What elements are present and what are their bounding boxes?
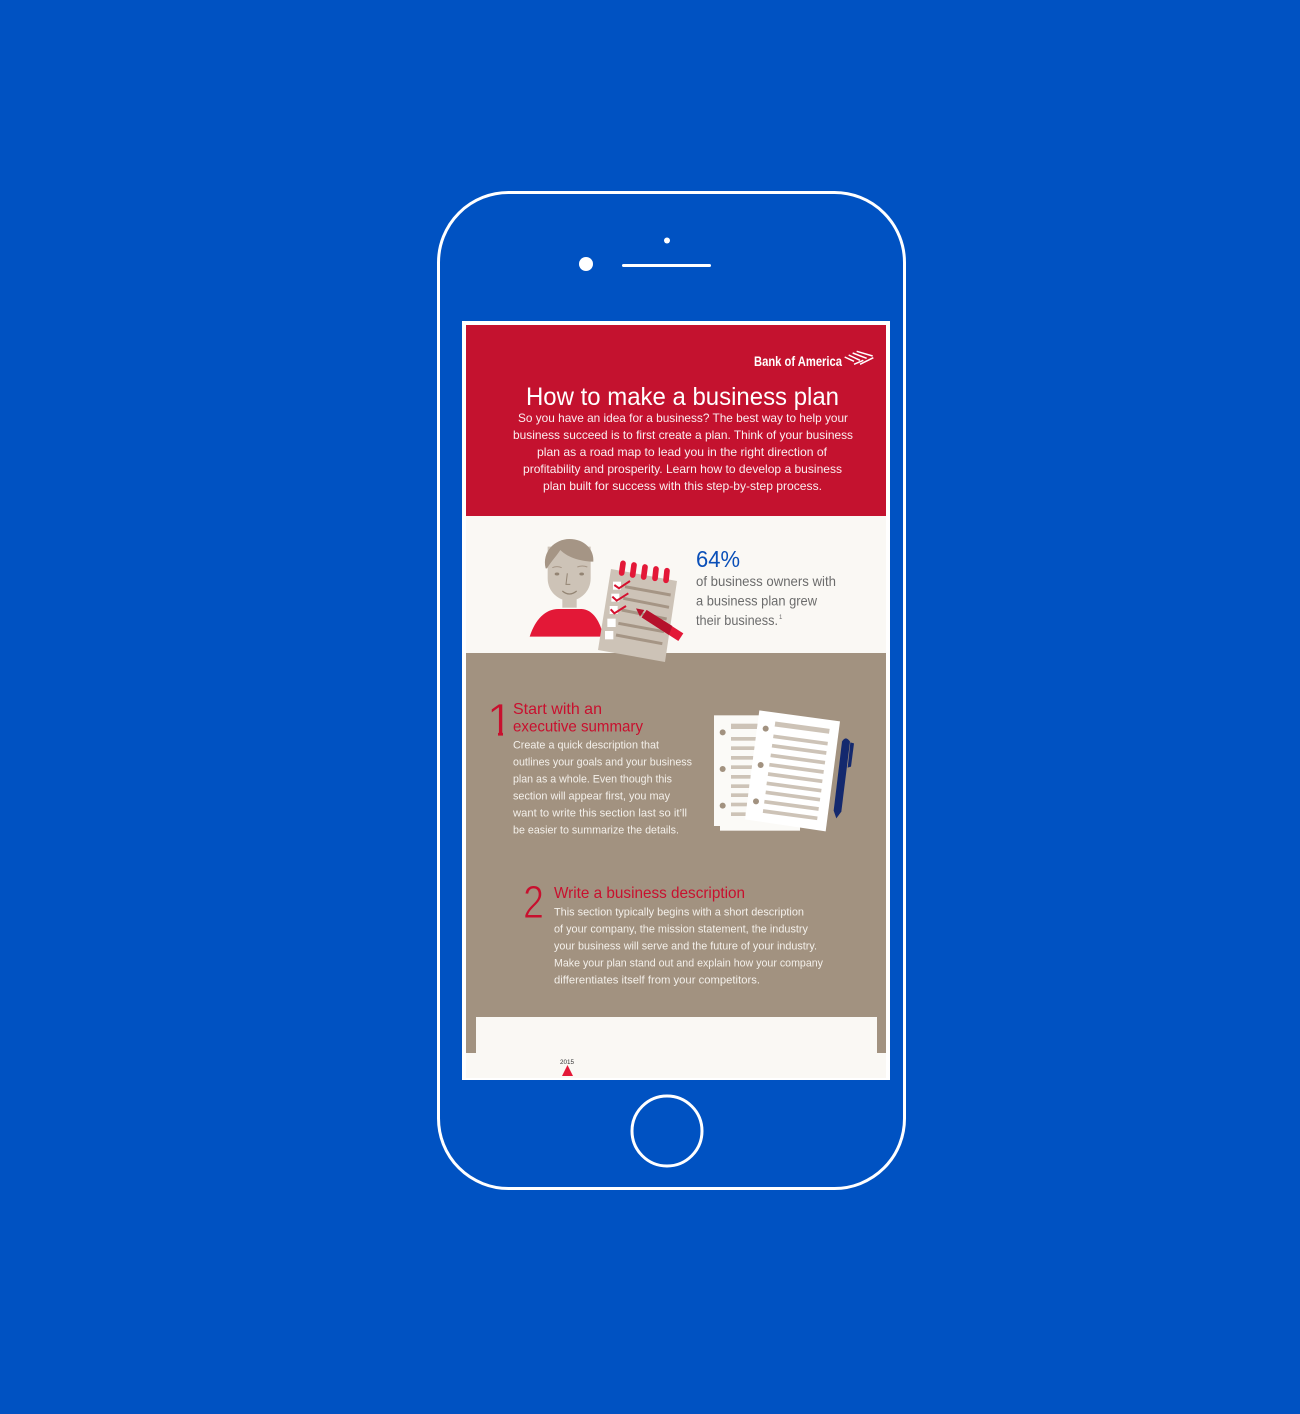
step 1 body: plan as a whole. Even though this	[513, 774, 672, 786]
statistic number: 64%	[696, 546, 740, 572]
cream timeline card	[476, 1017, 877, 1054]
intro text: plan as a road map to lead you in the right direction of	[537, 445, 828, 459]
phone mockup	[438, 192, 904, 1188]
pencil	[636, 608, 683, 641]
step 1 number: 1	[487, 694, 513, 746]
timeline marker	[560, 1060, 575, 1076]
step 1 heading: Start with an	[513, 701, 602, 718]
panel: steps	[466, 653, 886, 1054]
phone sensor	[664, 238, 670, 244]
statistic text: of business owners with	[696, 573, 836, 589]
timeline triangle	[562, 1065, 573, 1076]
icon: checklist with pencil	[598, 563, 683, 662]
intro text: So you have an idea for a business? The best way to help your	[518, 411, 848, 425]
person shirt	[530, 609, 604, 637]
timeline year: 2015	[560, 1060, 575, 1066]
notebook page	[598, 569, 677, 662]
pen	[834, 738, 854, 818]
step 2 body	[554, 906, 823, 986]
step 2 body: This section typically begins with a short description	[554, 906, 804, 918]
step 2 body: Make your plan stand out and explain how your company	[554, 958, 823, 970]
step 1 heading	[513, 701, 643, 736]
icon: papers and pen	[714, 710, 854, 831]
notebook checkboxes	[605, 582, 621, 639]
person face	[548, 547, 591, 601]
step 2 body: your business will serve and the future of your industry.	[554, 940, 817, 952]
person features	[552, 566, 587, 594]
step 2 number: 2	[523, 876, 544, 928]
intro text: business succeed is to first create a plan. Think of your business	[513, 428, 853, 442]
intro text	[513, 411, 853, 493]
logo: Bank of America	[754, 351, 873, 369]
logo wordmark: Bank of America	[754, 354, 842, 369]
notebook lines	[616, 587, 671, 644]
phone speaker	[622, 264, 711, 267]
back paper	[714, 715, 800, 831]
phone camera	[579, 257, 593, 271]
header background	[466, 325, 886, 516]
step 1 body: Create a quick description that	[513, 740, 659, 752]
notebook check marks	[611, 581, 630, 613]
step 1 body: want to write this section last so it’ll	[512, 808, 687, 820]
steps background	[466, 653, 886, 1053]
step 2 heading: Write a business description	[554, 885, 745, 902]
person neck	[562, 597, 577, 608]
phone screen	[462, 321, 890, 1080]
step 1 body	[512, 740, 692, 836]
panel: statistic	[530, 539, 836, 662]
phone outline	[438, 192, 904, 1188]
statistic text: their business.	[696, 612, 778, 628]
front paper	[745, 710, 840, 831]
screen background	[466, 325, 886, 1078]
step 1	[487, 694, 854, 836]
step 1 heading: executive summary	[513, 718, 643, 736]
step 2	[523, 876, 823, 986]
notebook spiral	[622, 563, 667, 580]
title: How to make a business plan	[526, 383, 839, 411]
statistic text: a business plan grew	[696, 592, 818, 608]
intro text: plan built for success with this step-by-step process.	[543, 479, 822, 493]
person hair	[545, 539, 593, 568]
step 1 body: outlines your goals and your business	[513, 756, 692, 768]
statistic text: 1	[779, 615, 783, 621]
intro text: profitability and prosperity. Learn how to develop a business	[523, 462, 842, 476]
statistic text	[696, 573, 836, 628]
step 2 body: of your company, the mission statement, the industry	[554, 924, 808, 936]
step 1 body: section will appear first, you may	[513, 790, 670, 802]
step 2 body: differentiates itself from your competitors.	[554, 974, 760, 986]
logo flag	[845, 351, 873, 364]
panel: red header	[466, 325, 886, 516]
phone home button	[632, 1096, 702, 1166]
icon: person	[530, 539, 604, 637]
step 1 body: be easier to summarize the details.	[513, 824, 679, 836]
screen frame	[462, 321, 890, 1080]
